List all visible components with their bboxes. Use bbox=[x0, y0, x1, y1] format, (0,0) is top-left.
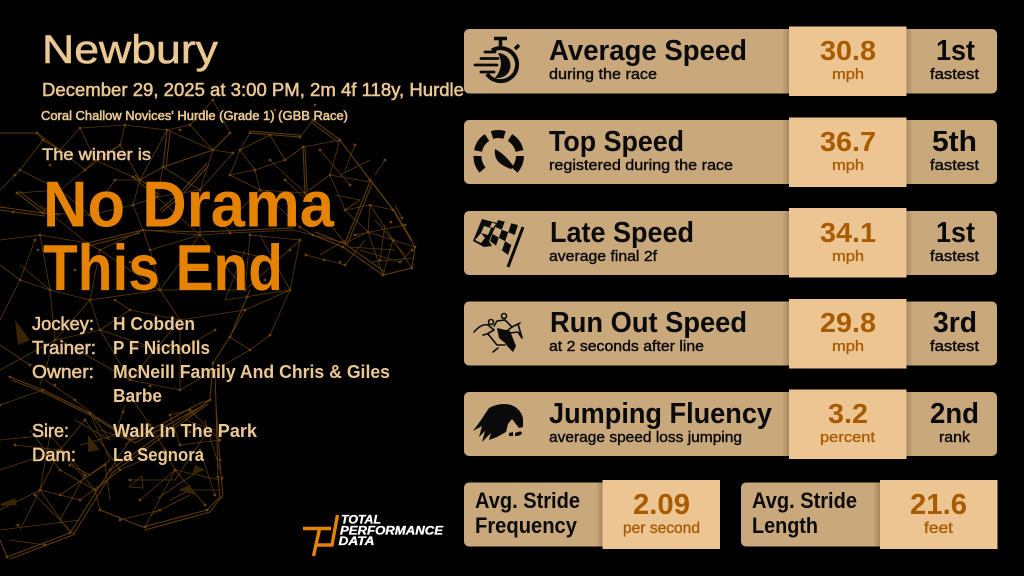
label: avg stride frequency bbox=[475, 488, 580, 538]
logo: Total Performance Data: TOTAL bbox=[341, 514, 381, 526]
rank: 2nd rank: rank bbox=[939, 429, 971, 446]
rank: 3rd fastest: 3rd bbox=[933, 307, 977, 339]
sublabel: at 2 seconds after line: at 2 seconds after line bbox=[549, 339, 704, 355]
logo: Total Performance Data bbox=[303, 514, 443, 556]
sublabel: registered during the race: registered during the race bbox=[549, 158, 733, 174]
value: 3.2 percent: percent bbox=[820, 429, 876, 446]
icon: stopwatch bbox=[475, 38, 519, 81]
connections list: Dam: bbox=[32, 445, 76, 465]
value: 30.8 mph bbox=[820, 35, 876, 83]
label: top speed: Top Speed bbox=[549, 126, 684, 158]
icon: racing jockeys bbox=[474, 314, 522, 352]
rank: 5th fastest: 5th bbox=[932, 126, 977, 158]
label: avg stride frequency: Avg. Stride bbox=[475, 488, 580, 513]
connections list: H Cobden bbox=[113, 314, 195, 334]
rank: 1st fastest: 1st bbox=[936, 35, 975, 67]
connections list: McNeill Family And Chris & Giles bbox=[113, 362, 390, 382]
rank: 5th fastest bbox=[930, 126, 980, 174]
sublabel: average speed loss jumping: average speed loss jumping bbox=[549, 430, 742, 446]
panel: average stride frequency bbox=[464, 480, 720, 549]
connections list: Sire: bbox=[32, 421, 69, 441]
connections list: Jockey: bbox=[32, 314, 94, 334]
text: race name: Coral Challow Novices' Hurdle (Grade 1) (GBB Race) bbox=[41, 109, 348, 123]
value: 2.09 per second bbox=[623, 489, 700, 537]
connections list: Walk In The Park bbox=[113, 421, 258, 441]
value: 2.09 per second: 2.09 bbox=[633, 489, 690, 521]
text: winner intro: The winner is bbox=[42, 145, 151, 164]
rank: 2nd rank bbox=[930, 398, 979, 446]
icon: chequered flag bbox=[473, 219, 523, 267]
value: 3.2 percent bbox=[820, 398, 876, 446]
icon: jumping horse bbox=[473, 404, 523, 442]
value: 21.6 feet: 21.6 bbox=[910, 489, 967, 521]
value: 30.8 mph: 30.8 bbox=[820, 35, 876, 66]
label: avg stride length: Length bbox=[752, 513, 818, 538]
background: horse wireframe mesh bbox=[0, 100, 415, 559]
heading: course name: Newbury bbox=[42, 28, 218, 72]
connections list bbox=[32, 314, 390, 465]
text: race date and distance: December 29, 2025 at 3:00 PM, 2m 4f 118y, Hurdle bbox=[42, 79, 464, 100]
logo: Total Performance Data: PERFORMANCE bbox=[340, 526, 443, 538]
panel: top speed bbox=[464, 118, 997, 187]
label: run out speed: Run Out Speed bbox=[550, 307, 747, 339]
connections list: P F Nicholls bbox=[113, 338, 210, 358]
panel: average speed bbox=[464, 26, 997, 96]
label: average speed: Average Speed bbox=[549, 35, 747, 67]
value: 30.8 mph: mph bbox=[832, 66, 864, 83]
rank: 3rd fastest: fastest bbox=[930, 338, 980, 355]
connections list: Barbe bbox=[113, 386, 162, 406]
value: 36.7 mph bbox=[820, 126, 876, 174]
label: late speed: Late Speed bbox=[550, 217, 694, 249]
value: 21.6 feet bbox=[910, 489, 967, 537]
connections list: Owner: bbox=[32, 362, 94, 382]
value: 2.09 per second: per second bbox=[623, 520, 700, 537]
label: jumping fluency: Jumping Fluency bbox=[549, 398, 772, 430]
rank: 1st fastest bbox=[930, 217, 980, 265]
value: 36.7 mph: mph bbox=[832, 157, 864, 174]
heading: winner name: No Drama bbox=[43, 168, 335, 240]
value: 29.8 mph: 29.8 bbox=[820, 307, 876, 338]
logo: Total Performance Data: DATA bbox=[338, 536, 374, 548]
rank: 1st fastest: 1st bbox=[936, 217, 975, 249]
value: 34.1 mph: 34.1 bbox=[820, 217, 876, 248]
rank: 1st fastest: fastest bbox=[930, 248, 980, 265]
label: avg stride length bbox=[752, 488, 857, 538]
heading: winner name: This End bbox=[43, 231, 283, 304]
rank: 3rd fastest bbox=[930, 307, 980, 355]
panel: run out speed bbox=[464, 299, 997, 368]
label: avg stride frequency: Frequency bbox=[475, 513, 578, 538]
value: 29.8 mph bbox=[820, 307, 876, 355]
icon: speedometer bbox=[477, 134, 520, 170]
value: 36.7 mph: 36.7 bbox=[820, 126, 876, 157]
connections list: La Segnora bbox=[113, 445, 205, 465]
panel: average stride length bbox=[741, 480, 998, 549]
value: 29.8 mph: mph bbox=[832, 338, 864, 355]
rank: 1st fastest: fastest bbox=[930, 66, 980, 83]
sublabel: during the race: during the race bbox=[549, 67, 657, 83]
rank: 2nd rank: 2nd bbox=[930, 398, 979, 430]
rank: 1st fastest bbox=[930, 35, 980, 83]
connections list: Trainer: bbox=[32, 338, 96, 358]
rank: 5th fastest: fastest bbox=[930, 157, 980, 174]
value: 21.6 feet: feet bbox=[924, 520, 954, 537]
value: 34.1 mph bbox=[820, 217, 876, 265]
value: 34.1 mph: mph bbox=[832, 248, 864, 265]
label: avg stride length: Avg. Stride bbox=[752, 488, 857, 513]
sublabel: average final 2f: average final 2f bbox=[549, 249, 658, 265]
value: 3.2 percent: 3.2 bbox=[828, 398, 868, 429]
panel: late speed bbox=[464, 208, 997, 278]
heading: winner name bbox=[43, 168, 335, 304]
panel: jumping fluency bbox=[464, 390, 997, 459]
